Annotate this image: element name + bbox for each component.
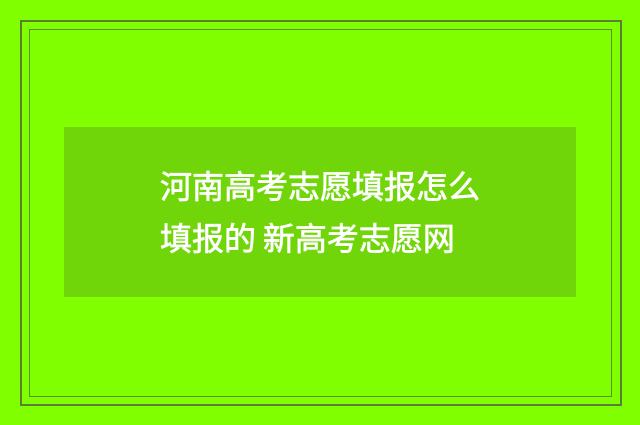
- title text: [160, 169, 480, 257]
- inner border frame: [29, 29, 612, 397]
- title text: 填报的 新高考志愿网: [160, 221, 455, 257]
- title text: 河南高考志愿填报怎么: [160, 169, 480, 205]
- title panel: [64, 127, 576, 297]
